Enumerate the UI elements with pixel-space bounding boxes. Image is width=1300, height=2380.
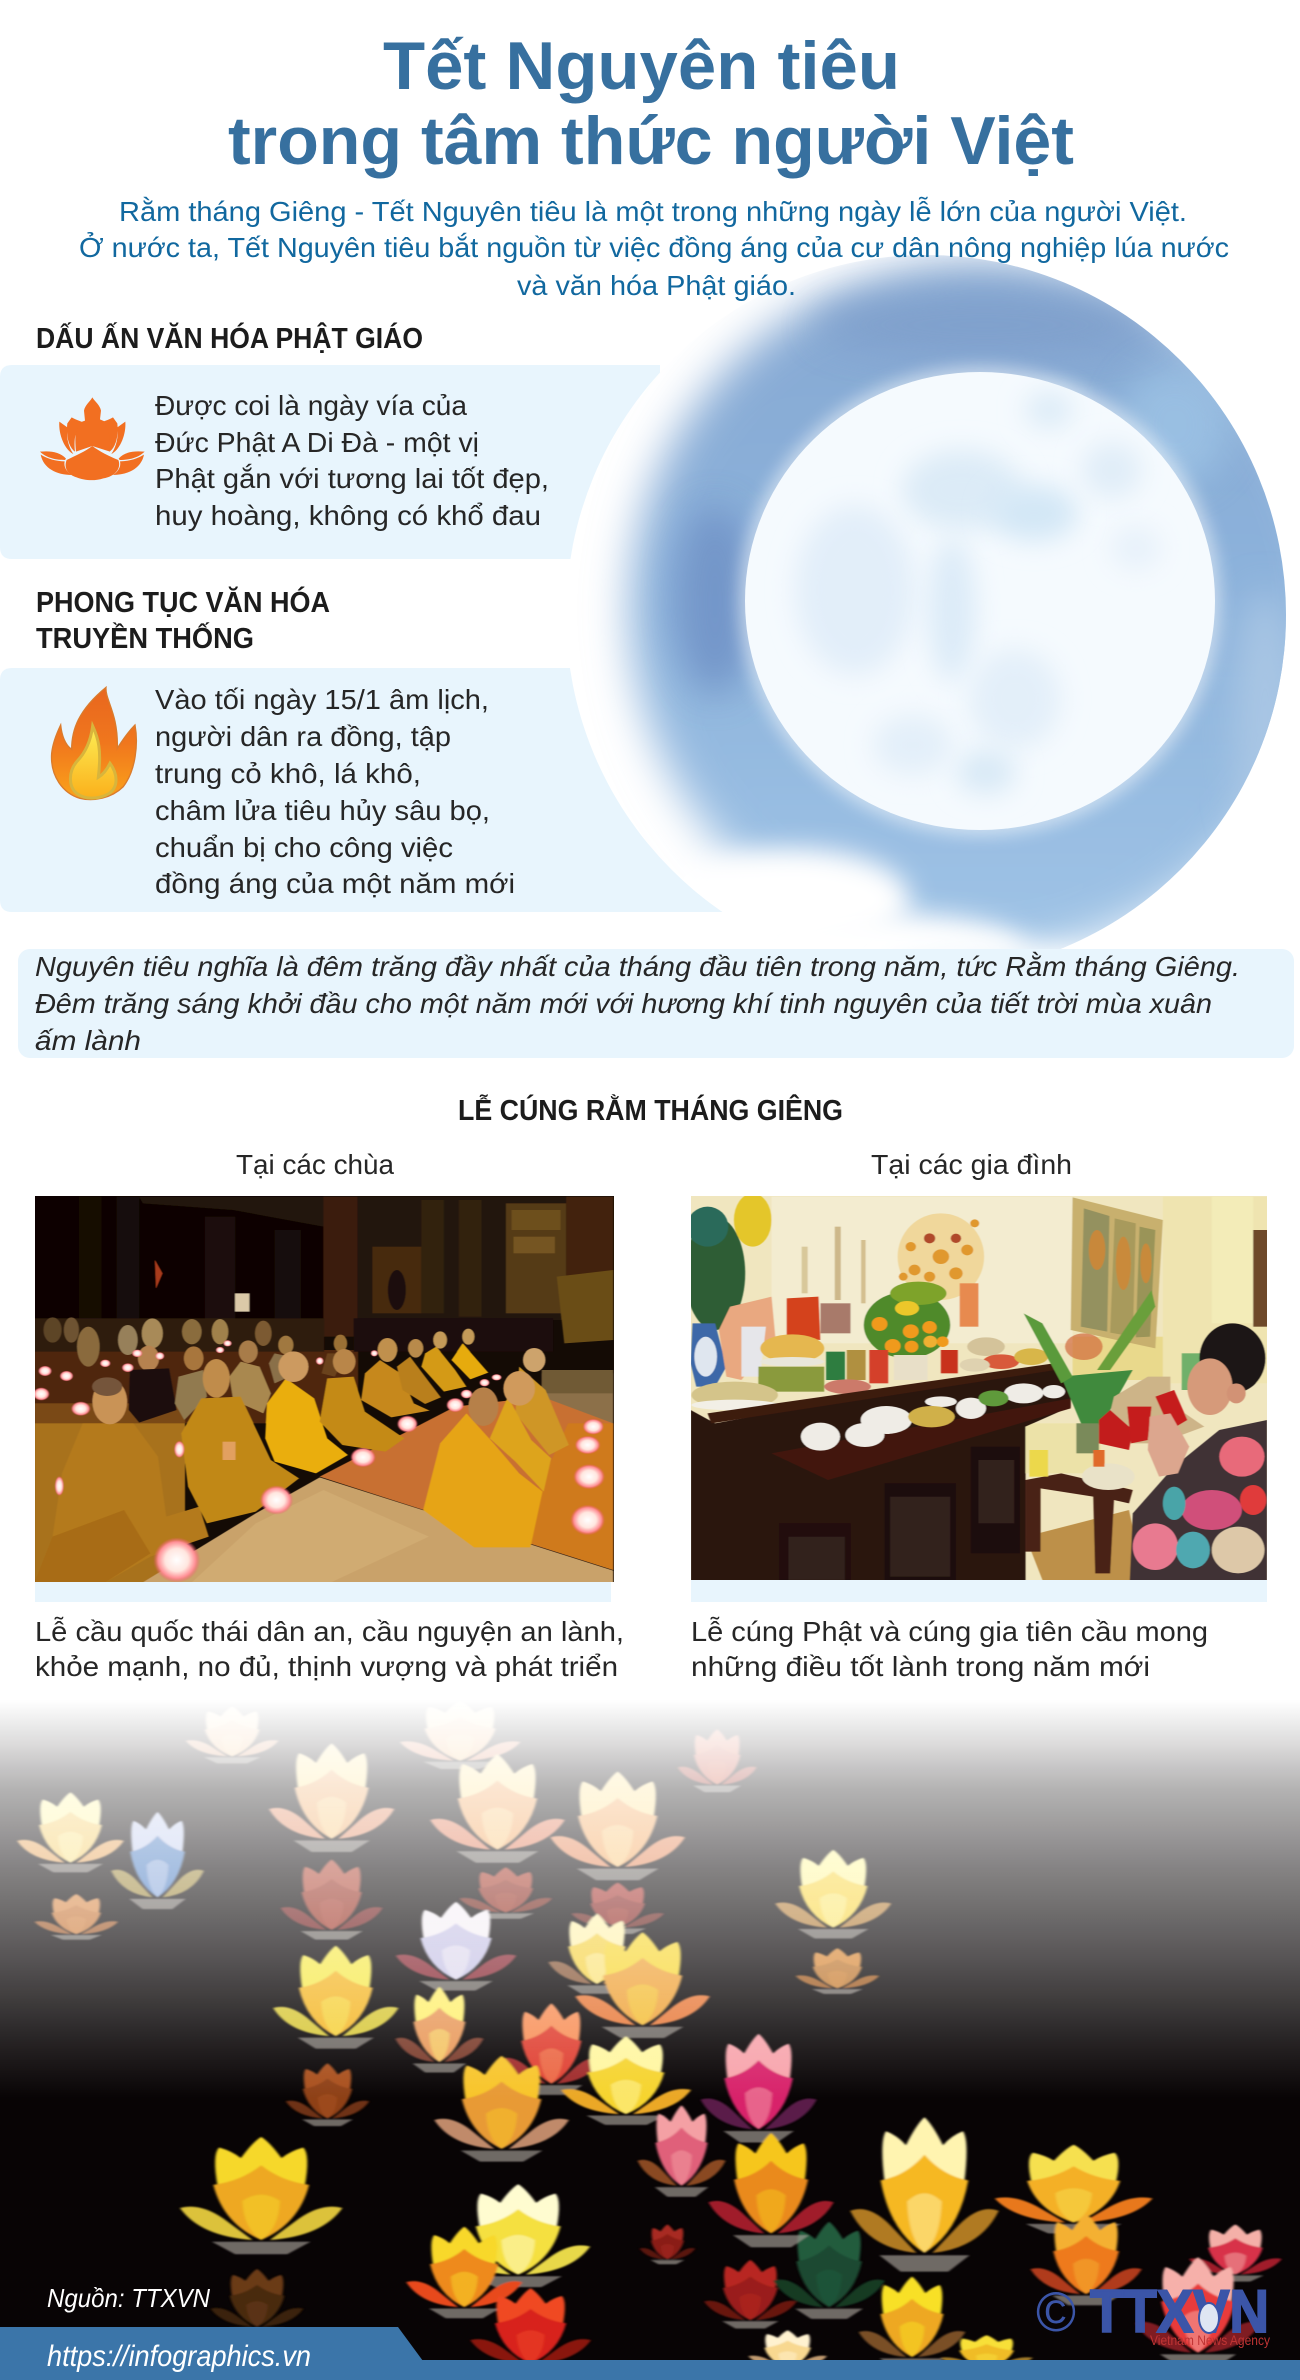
panel text: Buddhist culture: Đức Phật A Di Đà - một vị: [155, 427, 479, 458]
photo caption strip left: [35, 1582, 611, 1602]
caption: pagoda ritual: [35, 1616, 624, 1682]
lower lanterns: [180, 2117, 1282, 2374]
callout: meaning of Nguyên tiêu: ấm lành: [35, 1025, 141, 1056]
mid floor: [35, 1350, 358, 1423]
faded upper lanterns: [17, 1700, 891, 1938]
reflections: [34, 1859, 885, 2335]
foreground monks: [35, 1329, 569, 1582]
framed painting: [1071, 1197, 1163, 1348]
panel text: traditional customs: Vào tối ngày 15/1 âm lịch,: [155, 684, 489, 715]
column label: families: Tại các gia đình: [871, 1149, 1072, 1180]
callout: meaning of Nguyên tiêu: Nguyên tiêu nghĩa là đêm trăng đầy nhất của tháng đầu tiên trong năm, tức Rằm tháng Giêng.: [35, 951, 1240, 982]
back wall and pillars: [30, 1190, 323, 1323]
logo: TTXVN watermark: TTXVN: [1090, 2278, 1269, 2345]
incense sticks and golden tree: [802, 1247, 808, 1293]
panel: traditional customs background: [0, 668, 740, 912]
footer bar: [0, 2327, 1300, 2380]
callout: meaning of Nguyên tiêu: Đêm trăng sáng khởi đầu cho một năm mới với hương khí tinh nguyên của tiết trời mùa xuân: [35, 988, 1212, 1019]
panel text: Buddhist culture: [155, 390, 549, 531]
praying woman: [1130, 1323, 1267, 1580]
heading: full moon rituals: LỄ CÚNG RẰM THÁNG GIÊNG: [458, 1093, 843, 1127]
intro text: Ở nước ta, Tết Nguyên tiêu bắt nguồn từ việc đồng áng của cư dân nông nghiệp lúa nước: [79, 231, 1229, 263]
intro text: và văn hóa Phật giáo.: [517, 270, 796, 301]
callout: meaning of Nguyên tiêu: [18, 949, 1294, 1058]
logo: TTXVN watermark: Vietnam News Agency: [1150, 2332, 1270, 2348]
caption: pagoda ritual: Lễ cầu quốc thái dân an, cầu nguyện an lành,: [35, 1616, 624, 1647]
panel text: traditional customs: người dân ra đồng, tập: [155, 721, 451, 752]
panel text: traditional customs: [155, 684, 515, 899]
stone floor and carpets: [320, 1397, 613, 1570]
title: [228, 28, 1074, 179]
floating lanterns image: [0, 1700, 1300, 2374]
panel text: Buddhist culture: Phật gắn với tương lai tốt đẹp,: [155, 463, 549, 494]
bowls on lower shelf: [801, 1383, 1065, 1451]
icon: flame: [52, 687, 136, 800]
side table and small offerings: [1026, 1473, 1133, 1573]
caption: pagoda ritual: khỏe mạnh, no đủ, thịnh vượng và phát triển: [35, 1651, 618, 1682]
sofa and cushions: [1103, 1377, 1204, 1443]
caption: family ritual: những điều tốt lành trong năm mới: [691, 1651, 1150, 1682]
heading: Buddhist culture: DẤU ẤN VĂN HÓA PHẬT GIÁO: [36, 321, 423, 355]
white fade overlay: [0, 1700, 1300, 2100]
intro text: [79, 196, 1229, 301]
caption: family ritual: [691, 1616, 1208, 1682]
altar cabinet: [691, 1363, 1071, 1580]
logo: TTXVN watermark: [1036, 2278, 1270, 2348]
website url: https://infographics.vn: [47, 2340, 311, 2373]
source line: Nguồn: TTXVN: [47, 2283, 210, 2313]
heading: traditional customs: TRUYỀN THỐNG: [36, 621, 254, 655]
title: trong tâm thức người Việt: [228, 103, 1074, 179]
middle lanterns: [273, 1902, 817, 2197]
heading: traditional customs: [36, 585, 330, 655]
panel: Buddhist culture background: [0, 365, 660, 559]
offerings on upper shelf: [691, 1282, 1048, 1410]
logo: TTXVN watermark: ©: [1036, 2280, 1076, 2343]
photo: family altar: [685, 1193, 1268, 1580]
panel text: Buddhist culture: Được coi là ngày vía của: [155, 390, 467, 421]
heading: traditional customs: PHONG TỤC VĂN HÓA: [36, 585, 330, 619]
left plant and flowers: [685, 1217, 745, 1330]
audience band: [35, 1318, 324, 1352]
caption: family ritual: Lễ cúng Phật và cúng gia tiên cầu mong: [691, 1616, 1208, 1647]
background seated monks: [129, 1335, 347, 1423]
full moon illustration: [566, 255, 1300, 1005]
panel text: traditional customs: chuẩn bị cho công việc: [155, 832, 453, 863]
column label: pagodas: Tại các chùa: [236, 1149, 394, 1180]
panel text: Buddhist culture: huy hoàng, không có khổ đau: [155, 500, 541, 531]
icon: orange lotus Buddha: [40, 397, 145, 480]
photo: monks praying at pagoda: [30, 1190, 614, 1583]
photo caption strip right: [691, 1580, 1267, 1602]
title: Tết Nguyên tiêu: [383, 28, 900, 104]
pink lotus lamps: [33, 1340, 605, 1583]
gladiolus flowers: [1063, 1370, 1134, 1424]
panel text: traditional customs: đồng áng của một năm mới: [155, 868, 515, 899]
wall and room: [772, 1197, 1073, 1343]
intro text: Rằm tháng Giêng - Tết Nguyên tiêu là một trong những ngày lễ lớn của người Việt.: [119, 196, 1187, 227]
panel text: traditional customs: trung cỏ khô, lá khô,: [155, 758, 421, 789]
moon disc: [739, 366, 1221, 836]
panel text: traditional customs: châm lửa tiêu hủy sâu bọ,: [155, 795, 490, 826]
